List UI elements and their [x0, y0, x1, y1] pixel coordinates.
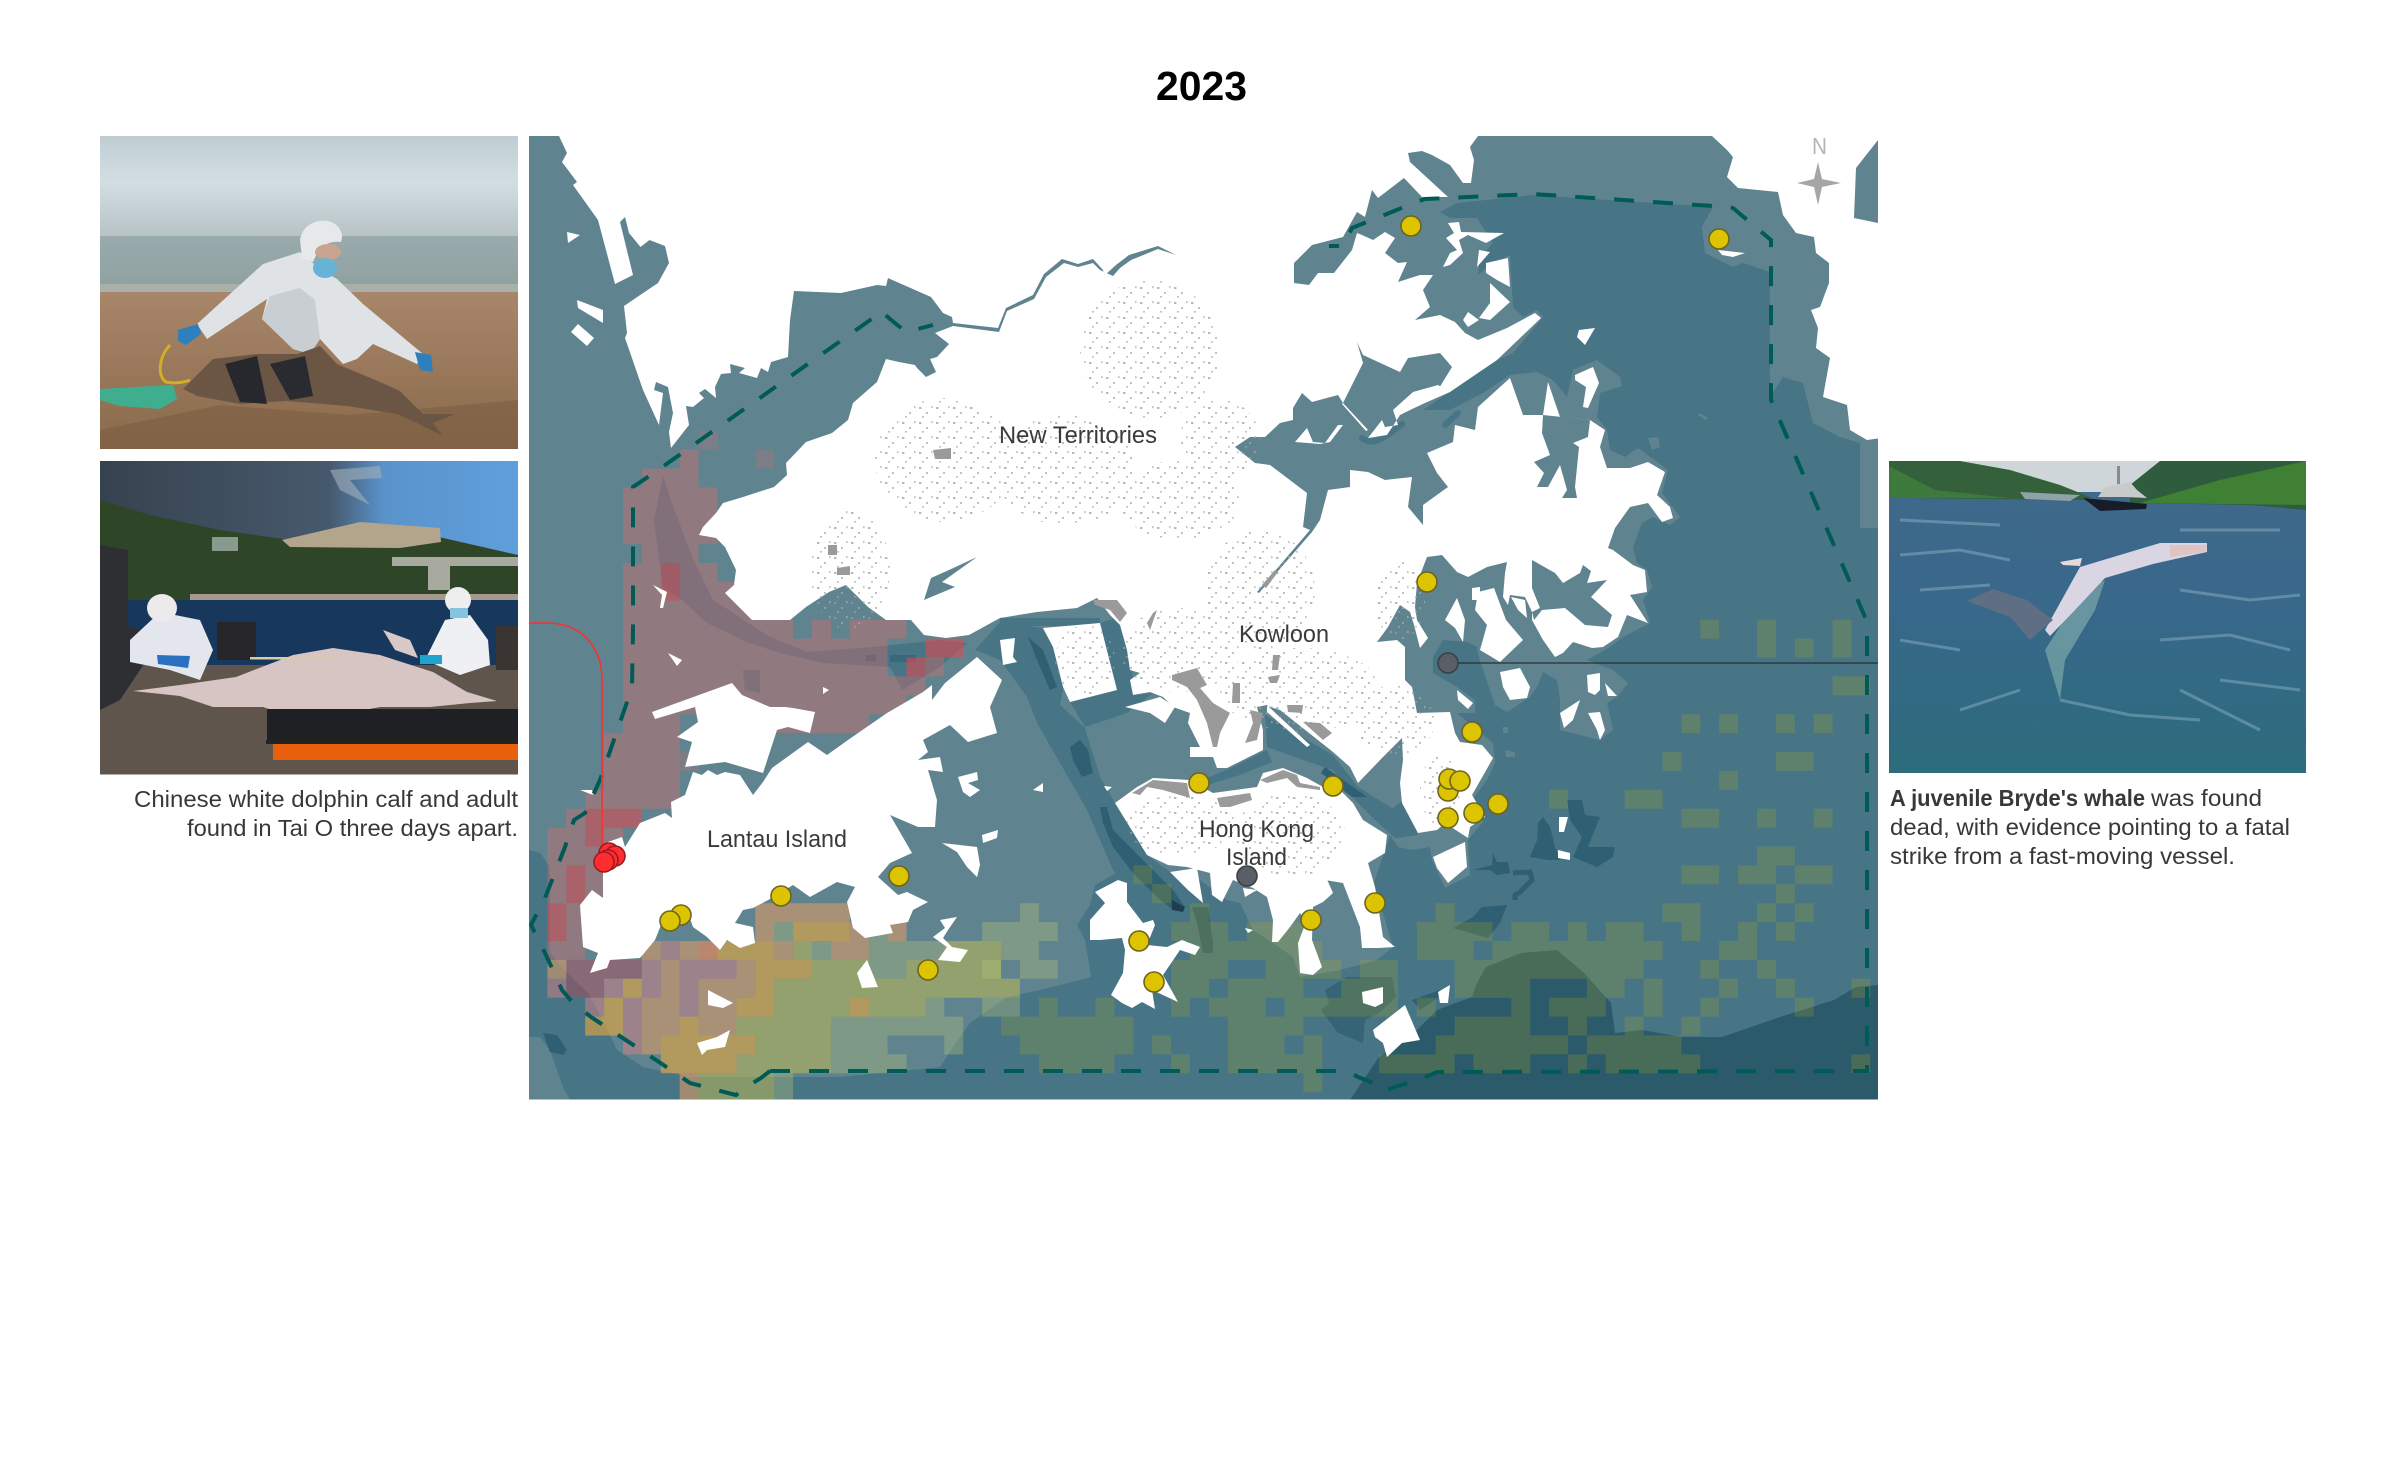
label: Lantau Island: Lantau Island: [707, 826, 847, 853]
caption: Bryde's whale: A juvenile Bryde's whale: [1890, 785, 2145, 811]
sea: southwest shallows: [529, 1037, 570, 1100]
land: islands: [567, 222, 1745, 1057]
sea: offshore water: [529, 136, 1879, 1100]
caption: Bryde's whale: dead, with evidence pointing to a fatal: [1890, 814, 2290, 840]
land: east coast region beyond Mirs Bay: [1712, 130, 1882, 440]
label: Hong Kong Island: Hong Kong: [1199, 816, 1314, 843]
land: Hong Kong Island: [1115, 768, 1395, 975]
caption: Chinese white dolphin: found in Tai O three days apart.: [187, 815, 518, 841]
title: 2023: [1156, 63, 1247, 109]
chart: brown overlap cells: [547, 903, 906, 1111]
photo: two researchers with adult dolphin on pier: [100, 461, 518, 775]
sea: deep channel patches: [543, 637, 1615, 1055]
icon: north compass: [1797, 133, 1841, 205]
label: New Territories: New Territories: [999, 422, 1157, 449]
chart: olive green cells: [699, 941, 1020, 1111]
urban stipple: building footprints: [810, 280, 1460, 877]
caption: Bryde's whale: was found: [2150, 785, 2262, 811]
photo: Bryde's whale tail in the sea: [1889, 461, 2306, 773]
land: inlets cut into the mainland: [924, 415, 1612, 627]
sea: deep water southeast: [1350, 950, 1878, 1100]
chart: lilac overlap cells: [547, 941, 736, 1054]
caption: Chinese white dolphin: Chinese white dolphin calf and adult: [134, 786, 519, 812]
label: Kowloon: Kowloon: [1239, 621, 1329, 648]
sea: Ma Wan and East Lamma channels: [975, 622, 1177, 912]
sea: shallow coastal water: [529, 136, 1878, 1077]
sea: small shoals east: [1503, 413, 1708, 757]
sea: Tolo channel streaks: [1362, 413, 1458, 442]
land: Lantau Island: [580, 657, 1002, 973]
land: north-west, New Territories, Kowloon and Sai Kung: [559, 130, 1673, 838]
connector: red line from dolphin photo: [529, 622, 603, 846]
chart: tan overlap cells: [585, 922, 869, 1073]
urban: dense built-up grey areas: [828, 448, 1332, 807]
connector: grey line from whale photo: [1458, 662, 1889, 664]
photo: researcher kneeling over dolphin calf on beach: [100, 136, 518, 449]
markers: yellow stranding records: [660, 216, 1729, 992]
chart: weak green cells: [774, 903, 1058, 1111]
sea: western shipping channel: [654, 476, 967, 693]
chart: pink dolphin sighting density grid: [547, 431, 1870, 1111]
chart: eastern finless porpoise cells: [1001, 620, 1870, 1092]
boundary: marine waters dashed line: [531, 194, 1867, 1095]
markers: grey whale records: [1237, 653, 1458, 886]
icon: north compass: N: [1812, 133, 1827, 159]
land: Chek Lap Kok airport and Tung Chung: [652, 683, 815, 773]
panel: map of Hong Kong waters: [518, 130, 1889, 1111]
label: Hong Kong Island: Island: [1226, 844, 1287, 871]
land: small teal patch north-east corner: [1854, 140, 1878, 223]
markers: red dolphin records: [594, 843, 625, 872]
caption: Bryde's whale: strike from a fast-moving vessel.: [1890, 843, 2235, 869]
